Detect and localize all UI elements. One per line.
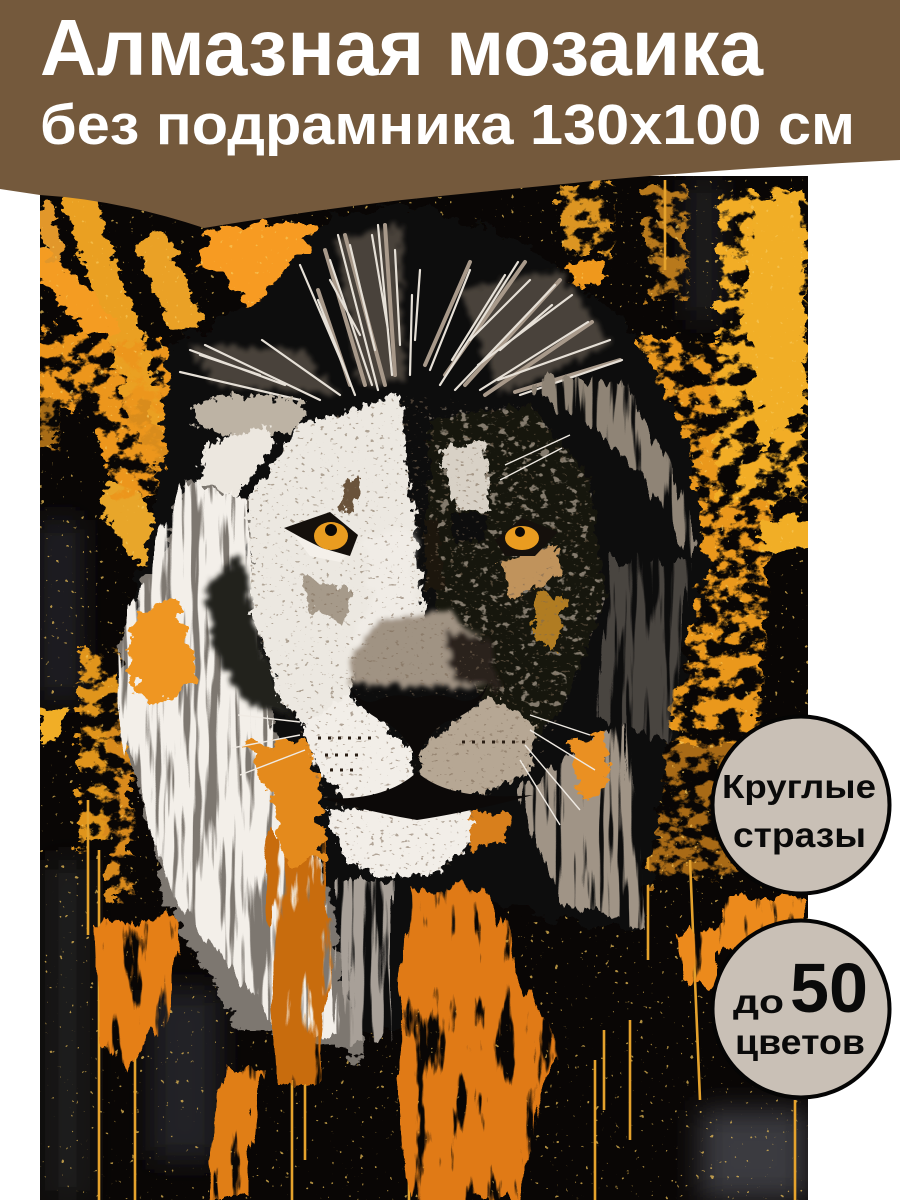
bright gold strokes on the right bbox=[40, 190, 808, 742]
badge: up to 50 colours: до bbox=[733, 983, 784, 1020]
left white mane, light fur bbox=[118, 480, 340, 1040]
left eye bbox=[284, 512, 358, 562]
face: right dark side bbox=[422, 405, 605, 745]
orange paint diagonal strokes, upper left bbox=[40, 205, 232, 545]
painting background bbox=[40, 176, 808, 1200]
nose philtrum and mouth bbox=[320, 772, 533, 820]
badge: up to 50 colours: 50 bbox=[790, 949, 868, 1027]
whiskers bbox=[232, 435, 595, 825]
dark grey brushed patches bbox=[40, 180, 808, 1200]
badge: round rhinestones bbox=[712, 716, 890, 894]
mane base bbox=[115, 205, 705, 1040]
subtitle: без подрамника 130х100 см bbox=[40, 93, 855, 157]
nose bridge bbox=[350, 528, 500, 690]
right mane grey strands bbox=[520, 720, 645, 930]
orange patch, top centre-left bbox=[196, 218, 318, 308]
badge: round rhinestones: Круглые bbox=[722, 768, 876, 805]
badge: up to 50 colours bbox=[712, 920, 890, 1098]
orange paint running down bbox=[96, 830, 808, 1200]
thin paint drips bbox=[88, 180, 795, 1200]
face markings bbox=[300, 408, 565, 650]
mottled orange areas bbox=[40, 185, 808, 900]
title: Алмазная мозаика bbox=[40, 3, 763, 92]
top mane strands bbox=[180, 225, 622, 400]
orange over the left cheek fur bbox=[248, 738, 325, 860]
orange patch on the mane bbox=[130, 598, 198, 708]
left ear lock bbox=[193, 395, 305, 505]
muzzle bbox=[302, 695, 535, 878]
lighter fur flecks on the dark side bbox=[422, 406, 605, 742]
central hanging strands bbox=[335, 880, 395, 1040]
dark shadow between mane and face bbox=[205, 550, 295, 720]
white and tan hair strokes bbox=[318, 225, 620, 395]
whisker dots bbox=[318, 738, 525, 770]
face: left white side bbox=[248, 395, 425, 730]
right eye bbox=[495, 518, 558, 585]
speckled paint spatter bbox=[40, 176, 808, 1200]
badge: up to 50 colours: цветов bbox=[735, 1023, 865, 1062]
banner: brown header bbox=[0, 0, 900, 228]
dark fur grain over the face bbox=[250, 396, 604, 876]
orange on right side bbox=[568, 728, 606, 795]
nose bbox=[348, 683, 488, 760]
painting: lion portrait in black, white and orange bbox=[40, 176, 808, 1200]
right hair lock bbox=[530, 375, 700, 555]
soft grey tufts behind the hair bbox=[190, 225, 610, 395]
badge: round rhinestones: стразы bbox=[733, 816, 866, 855]
left white mane, base tone bbox=[120, 480, 365, 1060]
